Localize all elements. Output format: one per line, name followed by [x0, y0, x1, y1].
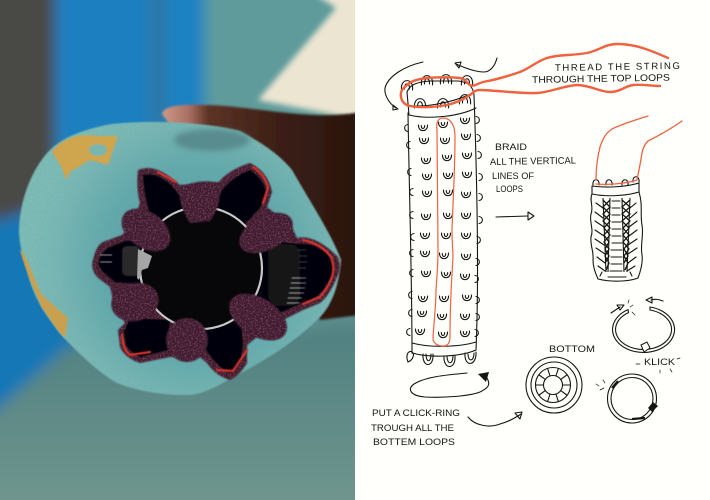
- ring clasp: [137, 249, 152, 280]
- red edges of the openings: [122, 167, 333, 371]
- side loops: [405, 116, 482, 336]
- bottle shoulder details: [100, 244, 307, 306]
- arrow: curved left of the cover: [385, 62, 423, 110]
- yellow pattern: top left: [52, 135, 118, 180]
- orange string threaded through top loops: [401, 44, 668, 107]
- text: thread the string: THREAD THE STRING: [555, 61, 680, 74]
- tall bottle cover drawing: [401, 75, 482, 366]
- cover outline: [591, 183, 643, 281]
- text: braid instruction: [490, 142, 577, 195]
- small braided cover drawing: [591, 116, 682, 281]
- text: klick: KLICK: [644, 357, 676, 368]
- text: klick: [636, 357, 680, 373]
- maroon knitted loops: [107, 181, 300, 362]
- bottom loops: [407, 351, 476, 366]
- ring motion arrows: [611, 297, 663, 313]
- text: thread the string: [532, 61, 680, 86]
- panel: photo of knitted bottle cover: [0, 0, 380, 500]
- arrow: to braided cover: [496, 212, 534, 220]
- hand holding the bottle: [162, 105, 360, 320]
- text: braid instruction: BRAID: [495, 142, 527, 153]
- bottom view of the cover: [526, 357, 582, 413]
- cover outline: [407, 81, 477, 356]
- orange strings: [596, 116, 682, 184]
- text: put a click-ring: TROUGH ALL THE: [371, 423, 454, 434]
- open click-ring: [611, 297, 675, 352]
- arrow: to bottom view: [468, 412, 522, 426]
- black bottle openings: [98, 170, 334, 373]
- arrow: curved above the cover: [455, 58, 497, 72]
- closed click-ring: [596, 374, 658, 423]
- maroon edge of the opening: [92, 163, 340, 380]
- top loops: [401, 75, 473, 108]
- panel: hand-drawn instructions: [355, 0, 710, 500]
- darker knit shading at top: [174, 129, 250, 151]
- text: braid instruction: ALL THE VERTICAL: [490, 155, 577, 168]
- photo background: blurred wall and floor: [0, 0, 380, 500]
- text: put a click-ring: [371, 408, 460, 448]
- text: thread the string: THROUGH THE TOP LOOPS: [532, 73, 670, 86]
- arrow: loop around the bottom: [410, 372, 489, 397]
- metal ring around bottle base: [140, 207, 262, 329]
- text: bottom: BOTTOM: [549, 344, 595, 355]
- yellow pattern: left edge: [20, 250, 68, 338]
- photo background: cream sleeve: [258, 0, 362, 120]
- braids: [603, 198, 630, 272]
- text: put a click-ring: BOTTEM LOOPS: [373, 437, 455, 448]
- rows of U-shaped loops: [415, 118, 472, 338]
- text: put a click-ring: PUT A CLICK-RING: [372, 408, 460, 419]
- orange braid path: [433, 118, 455, 346]
- text: braid instruction: LOOPS: [496, 184, 523, 195]
- top loops: [593, 177, 639, 185]
- knitted cover body: [19, 122, 341, 395]
- text: braid instruction: LINES OF: [492, 171, 534, 182]
